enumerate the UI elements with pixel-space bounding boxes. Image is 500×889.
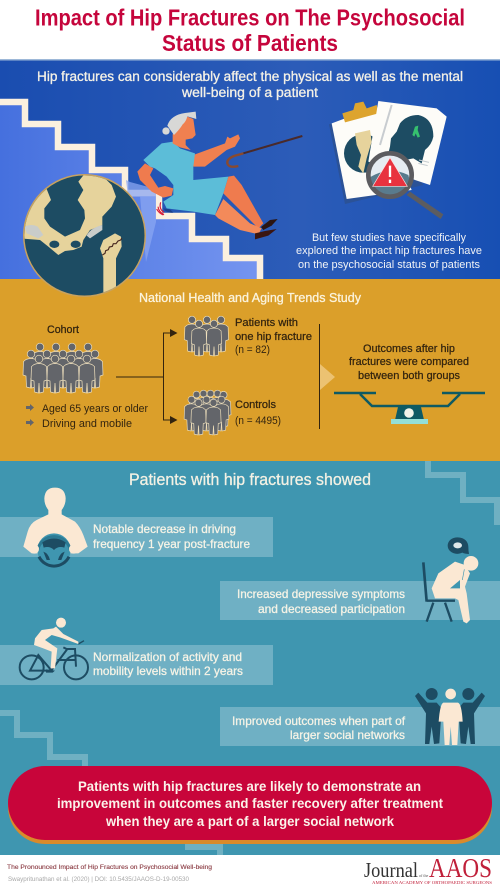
text: and decreased participation <box>258 602 405 616</box>
patients text: (n = 82) <box>235 344 270 356</box>
logo: AMERICAN ACADEMY OF ORTHOPAEDIC SURGEONS <box>372 880 493 885</box>
intro heading: well-being of a patient <box>181 85 318 100</box>
icon: patients group <box>184 316 229 356</box>
panel: results <box>0 461 500 855</box>
icon: cyclist <box>20 618 88 679</box>
title: Status of Patients <box>162 30 338 56</box>
icon: balance scale <box>334 393 485 424</box>
controls text: Controls <box>235 399 276 411</box>
text <box>93 650 243 678</box>
results heading: Patients with hip fractures showed <box>129 470 371 489</box>
text: Increased depressive symptoms <box>237 587 405 601</box>
callout wedge <box>126 180 156 262</box>
logo: Journal <box>364 858 418 882</box>
icon: driver <box>23 488 88 567</box>
stairs top right <box>428 461 497 525</box>
cohort label: Cohort <box>47 324 79 336</box>
text: frequency 1 year post-fracture <box>93 537 250 551</box>
patients text: one hip fracture <box>235 331 312 343</box>
icon: social group <box>415 688 485 745</box>
conclusion banner: Patients with hip fractures are likely to demonstrate an <box>78 778 421 794</box>
cohort criteria: Driving and mobile <box>42 418 132 430</box>
text <box>232 714 406 742</box>
text: Improved outcomes when part of <box>232 714 406 728</box>
text: mobility levels within 2 years <box>93 664 243 678</box>
icon: falling woman <box>137 112 278 239</box>
intro heading: Hip fractures can considerably affect the physical as well as the mental <box>37 69 463 84</box>
staircase <box>0 102 260 279</box>
icon: depressed seated person <box>423 537 478 623</box>
conclusion banner <box>8 766 492 844</box>
result bar 1 <box>0 488 273 567</box>
intro body text: on the psychosocial status of patients <box>298 259 480 271</box>
outcomes text: fractures were compared <box>349 356 469 368</box>
text <box>237 587 405 616</box>
outcomes text: between both groups <box>358 370 460 382</box>
intro body text <box>296 232 482 271</box>
arrows: cohort split <box>116 329 178 424</box>
cohort criteria: Aged 65 years or older <box>42 403 148 415</box>
divider and arrow <box>320 324 335 429</box>
icon: cane <box>227 136 302 167</box>
conclusion banner: when they are a part of a larger social network <box>105 813 394 829</box>
controls text: (n = 4495) <box>235 415 281 427</box>
icon: medical documents under magnifier <box>329 101 447 219</box>
icon: controls group <box>184 390 231 435</box>
text: Normalization of activity and <box>93 650 242 664</box>
result bar 3 <box>0 618 273 685</box>
article title: The Pronounced Impact of Hip Fractures on Psychosocial Well-being <box>7 864 212 871</box>
text <box>93 522 250 551</box>
logo: of the <box>419 873 428 878</box>
patients text: Patients with <box>235 317 298 329</box>
stairs bottom left <box>0 713 85 775</box>
citation: Swaypritunathan et al. (2020) | DOI: 10.5435/JAAOS-D-19-00530 <box>8 876 189 883</box>
result bar 2 <box>220 537 500 623</box>
intro body text: explored the impact hip fractures have <box>296 245 482 257</box>
study heading: National Health and Aging Trends Study <box>139 291 362 305</box>
text: larger social networks <box>290 728 405 742</box>
result bar 4 <box>220 688 500 746</box>
intro body text: But few studies have specifically <box>312 232 466 244</box>
icon: cohort group <box>23 343 103 393</box>
stairs under banner <box>185 847 220 855</box>
footer <box>7 853 493 885</box>
logo <box>364 853 493 885</box>
cohort criteria <box>26 403 148 430</box>
intro heading <box>37 69 463 100</box>
icon: hip joint x-ray <box>18 173 146 298</box>
text: Notable decrease in driving <box>93 522 236 536</box>
panel: intro <box>0 59 500 279</box>
patients text <box>235 317 312 356</box>
controls text <box>235 399 281 427</box>
outcomes text <box>349 343 469 382</box>
panel: study design <box>0 279 500 461</box>
conclusion banner: improvement in outcomes and faster recovery after treatment <box>57 795 443 811</box>
title <box>35 4 465 56</box>
outcomes text: Outcomes after hip <box>363 343 455 355</box>
